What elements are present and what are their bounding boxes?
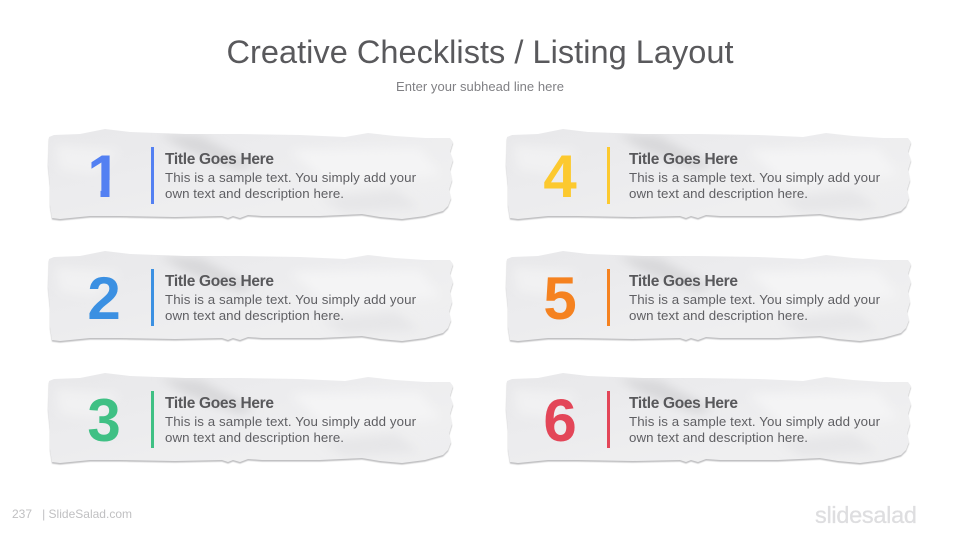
number 2: 2 bbox=[87, 265, 121, 332]
item 3 description: This is a sample text. You simply add your bbox=[165, 414, 417, 429]
paper strip 1 bbox=[40, 125, 460, 225]
footer page number: 237 | SlideSalad.com bbox=[12, 507, 132, 521]
item 4 description: own text and description here. bbox=[629, 186, 808, 201]
item 6 description: This is a sample text. You simply add your bbox=[629, 414, 881, 429]
panel: item 1 bbox=[48, 129, 454, 221]
title: Creative Checklists / Listing Layout bbox=[226, 34, 734, 70]
panel: item 3 bbox=[40, 369, 460, 469]
divider 1 bbox=[151, 147, 154, 204]
panel: item 2 bbox=[40, 247, 460, 347]
panel: item 4 bbox=[498, 125, 918, 225]
paper strip 3 bbox=[40, 369, 460, 469]
divider 4 bbox=[607, 147, 610, 204]
item 1 title: Title Goes Here bbox=[165, 151, 274, 168]
divider 2 bbox=[151, 269, 154, 326]
item 2 description: own text and description here. bbox=[165, 308, 344, 323]
item 4 title: Title Goes Here bbox=[629, 151, 738, 168]
item 5 description: own text and description here. bbox=[629, 308, 808, 323]
item 2 description: This is a sample text. You simply add your bbox=[165, 292, 417, 307]
footer logo: slidesalad bbox=[815, 502, 917, 528]
subtitle: Enter your subhead line here bbox=[396, 79, 564, 94]
number 5: 5 bbox=[543, 265, 577, 332]
item 5 description: This is a sample text. You simply add your bbox=[629, 292, 881, 307]
divider 5 bbox=[607, 269, 610, 326]
item 3 title: Title Goes Here bbox=[165, 395, 274, 412]
item 6 title: Title Goes Here bbox=[629, 395, 738, 412]
paper strip 5 bbox=[498, 247, 918, 347]
item 1 description: own text and description here. bbox=[165, 186, 344, 201]
item 5 title: Title Goes Here bbox=[629, 273, 738, 290]
number 3: 3 bbox=[87, 387, 121, 454]
paper strip 6 bbox=[498, 369, 918, 469]
item 2 title: Title Goes Here bbox=[165, 273, 274, 290]
item 3 description: own text and description here. bbox=[165, 430, 344, 445]
item 6 description: own text and description here. bbox=[629, 430, 808, 445]
divider 3 bbox=[151, 391, 154, 448]
number 4: 4 bbox=[543, 143, 577, 210]
panel: item 5 bbox=[498, 247, 918, 347]
paper strip 2 bbox=[40, 247, 460, 347]
item 4 description: This is a sample text. You simply add your bbox=[629, 170, 881, 185]
paper strip 4 bbox=[498, 125, 918, 225]
number 6: 6 bbox=[543, 387, 577, 454]
divider 6 bbox=[607, 391, 610, 448]
number 1: 1 bbox=[87, 143, 121, 210]
panel: item 6 bbox=[498, 369, 918, 469]
item 1 description: This is a sample text. You simply add your bbox=[165, 170, 417, 185]
